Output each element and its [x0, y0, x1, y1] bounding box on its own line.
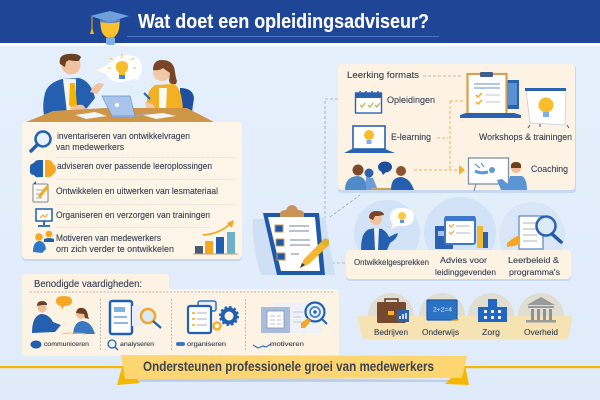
text: motiveren: [56, 233, 174, 254]
icon: laptop with bulb: [344, 126, 395, 153]
icon: advice materials: [435, 216, 488, 249]
label: leerbeleid: [508, 255, 560, 277]
label: motiveren: [253, 341, 304, 348]
connector lines: [322, 99, 360, 263]
icon: communiceren: [32, 296, 95, 334]
banner: conclusion ribbon: [0, 355, 600, 385]
label: workshops: Workshops & trainingen: [479, 132, 572, 142]
label: onderwijs: Onderwijs: [422, 327, 459, 337]
text: adviseren: adviseren over passende leeroplossingen: [57, 161, 212, 171]
icon: clipboard and monitor: [460, 72, 521, 118]
icon: coach: [497, 162, 527, 190]
heading: Benodigde vaardigheden:: [34, 279, 142, 290]
text: inventariseren: [56, 131, 190, 152]
chart: growth bars with arrow: [193, 220, 238, 254]
man: [43, 54, 104, 115]
icon: organiseren: [188, 301, 238, 333]
label: bedrijven: Bedrijven: [374, 327, 408, 337]
text: organiseren: Organiseren en verzorgen van trainingen: [56, 210, 210, 220]
label: motiveren: motiveren: [270, 341, 304, 348]
label: zorg: Zorg: [482, 327, 500, 337]
icon: school board: 2+2=4: [433, 308, 453, 314]
icon: flipchart with bulb: [525, 88, 569, 128]
label: leerbeleid: Leerbeleid &: [508, 255, 559, 265]
text: motiveren: Motiveren van medewerkers: [56, 233, 161, 243]
panel: learning formats: [338, 64, 576, 193]
label: coaching: Coaching: [531, 164, 568, 174]
icon: calendar: [355, 91, 382, 113]
icon: discussion group: [345, 162, 414, 190]
orange connectors: [414, 101, 465, 175]
label: e-learning: E-learning: [391, 132, 431, 142]
laptop: [102, 96, 149, 117]
text: inventariseren: van medewerkers: [56, 142, 124, 152]
table: [26, 108, 214, 122]
label: communiceren: communiceren: [44, 341, 89, 348]
speech bubble with light bulb: [96, 54, 142, 82]
icon: central clipboard with pencil: [253, 205, 335, 275]
icon: policy and magnifier: [507, 216, 561, 249]
woman: [144, 60, 183, 112]
text: motiveren: om zich verder te ontwikkelen: [56, 244, 174, 254]
icon: motivating people: [33, 231, 54, 253]
label: advies: [435, 255, 496, 277]
icon: presentation monitor: [36, 209, 52, 226]
header banner: [0, 0, 600, 46]
panel: sectors: [357, 293, 572, 339]
icon: analyseren: [110, 301, 161, 334]
label: communiceren: [30, 340, 89, 348]
icon: adviser with bubble: [361, 208, 414, 250]
icon: magnifier: [31, 132, 50, 151]
heading: Leerking formats: [347, 70, 419, 81]
icon: hospital: [478, 299, 507, 322]
papers: [75, 112, 107, 119]
label: opleidingen: Opleidingen: [387, 95, 435, 105]
text: ontwikkelen: Ontwikkelen en uitwerken van lesmateriaal: [56, 186, 218, 196]
sector backdrops: [368, 293, 564, 316]
label: overheid: Overheid: [524, 327, 558, 337]
icon: graduation cap with light bulb: [90, 11, 129, 45]
icon: whiteboard: [468, 158, 508, 191]
panel: benodigde vaardigheden: [22, 274, 339, 356]
title: Wat doet een opleidingsadviseur?: [138, 11, 429, 33]
icon: briefcase: [377, 299, 409, 323]
label: analyseren: [108, 340, 154, 350]
icon: school board: [427, 300, 460, 321]
text: inventariseren: inventariseren van ontwikkelvragen: [57, 131, 190, 141]
label: advies: leidinggevenden: [435, 267, 496, 277]
illustration: adviser conversation: [26, 54, 214, 122]
icon: government building: [526, 297, 556, 322]
label: analyseren: analyseren: [120, 341, 154, 348]
panel: tasks: [22, 122, 242, 261]
icon: motiveren: [261, 302, 327, 333]
circle backdrops: [354, 197, 565, 269]
panel: consult services: [346, 197, 571, 281]
icon: document with pencil: [33, 181, 48, 202]
chair: [180, 88, 194, 112]
banner text: Ondersteunen professionele groei van medewerkers: [143, 359, 434, 374]
label: organiseren: organiseren: [187, 341, 226, 348]
label: leerbeleid: programma's: [509, 267, 560, 277]
label: organiseren: [176, 341, 226, 348]
icon: brain: [30, 160, 56, 177]
label: advies: Advies voor: [440, 255, 487, 265]
dividers: [56, 158, 235, 228]
label: ontwikkelgesprekken: Ontwikkelgesprekken: [354, 257, 429, 267]
